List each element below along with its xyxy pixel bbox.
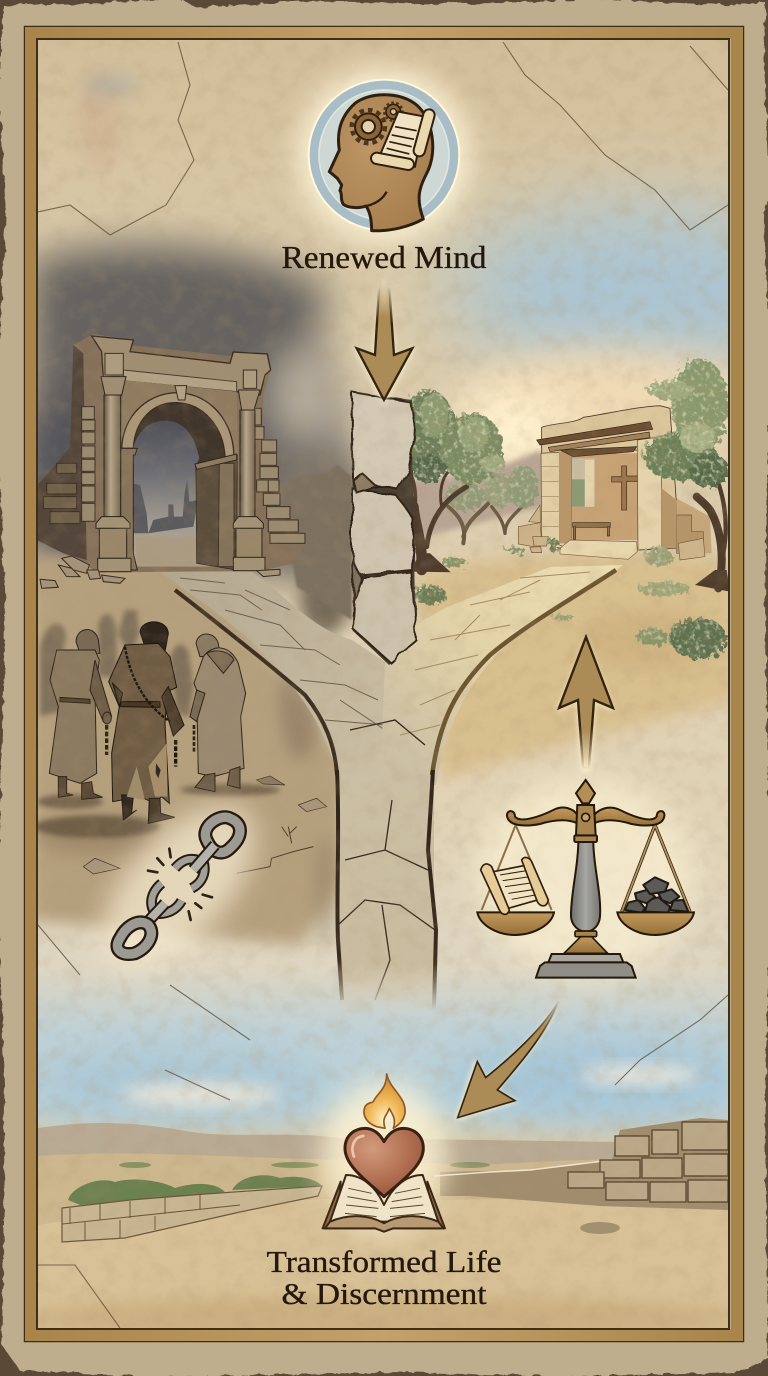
stone block courses bbox=[43, 407, 305, 543]
shaded left flank bbox=[38, 345, 87, 560]
foreground ground bbox=[38, 1199, 728, 1328]
right captive bbox=[190, 634, 246, 792]
road stem cracks bbox=[338, 720, 435, 1000]
stone column bbox=[571, 842, 600, 932]
left column bbox=[96, 377, 131, 572]
lower collar bbox=[575, 931, 597, 937]
ground stone bbox=[580, 1222, 620, 1234]
coal stones bbox=[625, 877, 688, 913]
inside back wall bbox=[571, 453, 638, 540]
near olive trees bbox=[400, 358, 730, 659]
right field wall bbox=[440, 1118, 728, 1210]
left hanger cords bbox=[482, 825, 552, 910]
distant towers bbox=[133, 478, 198, 533]
arch moulding bbox=[122, 393, 234, 457]
finial bbox=[576, 780, 595, 803]
lower broken link bbox=[142, 883, 182, 928]
ruined Roman arch bbox=[30, 334, 352, 620]
steps bbox=[560, 540, 637, 559]
right olive tree bbox=[643, 358, 730, 592]
icon: balance scales bbox=[475, 777, 695, 978]
view through arch bbox=[133, 421, 199, 567]
right column bbox=[233, 390, 265, 571]
ground crack with sprout bbox=[237, 827, 313, 873]
sky and weather washes bbox=[25, 70, 768, 1120]
top link bbox=[205, 817, 240, 853]
ground stones bbox=[83, 776, 327, 874]
distant ruin hill bbox=[280, 465, 352, 620]
floor through arch bbox=[136, 537, 210, 567]
caption: Transformed Life and Discernment: & Discernment bbox=[282, 1276, 487, 1311]
large gear bbox=[352, 110, 385, 143]
pergola roof bbox=[537, 422, 653, 457]
pivot bolt bbox=[582, 813, 590, 821]
upper plaster wall bbox=[542, 406, 677, 550]
glow halo bbox=[321, 1082, 447, 1232]
shrubs bbox=[413, 538, 727, 659]
left low wall bbox=[62, 1186, 322, 1242]
open scroll on left pan bbox=[481, 857, 548, 914]
wall top highlight bbox=[434, 1160, 612, 1176]
blue medallion bbox=[309, 80, 459, 230]
icon: renewed mind head bbox=[297, 68, 471, 242]
hut distant olive trees bbox=[444, 465, 538, 543]
scroll bbox=[377, 112, 429, 167]
dividing stone wall bbox=[352, 392, 416, 664]
arch opening vault bbox=[134, 403, 224, 482]
heart bbox=[345, 1128, 423, 1197]
left olive tree bbox=[400, 390, 504, 572]
heart highlight bbox=[352, 1136, 363, 1157]
right hanger cords bbox=[622, 825, 690, 912]
dark path left kerb bbox=[175, 590, 337, 775]
caption: Transformed Life and Discernment bbox=[266, 1244, 502, 1311]
arrow: down from mind to wall bbox=[353, 277, 417, 405]
arrow: up from scales to chapel bbox=[556, 637, 615, 772]
head silhouette bbox=[329, 95, 433, 231]
bottom link bbox=[117, 922, 151, 954]
right pan bbox=[617, 912, 694, 935]
cross on wall bbox=[612, 466, 639, 510]
chain glow bbox=[74, 779, 282, 994]
stone base bbox=[548, 954, 623, 962]
right stone wall bbox=[568, 1122, 728, 1202]
pivot bbox=[576, 805, 596, 835]
right pier bbox=[196, 455, 237, 570]
road stem bbox=[340, 785, 436, 1002]
brass foot bbox=[564, 937, 608, 953]
keystone bbox=[175, 386, 187, 400]
rolling hills bbox=[38, 1123, 728, 1200]
window bbox=[572, 458, 595, 507]
distant bushes bbox=[68, 1162, 490, 1205]
right path stone joints bbox=[400, 572, 590, 735]
distant hills on right bbox=[413, 448, 542, 538]
stone chapel hut bbox=[518, 406, 712, 560]
center captive bbox=[109, 622, 184, 823]
left path stone joints bbox=[180, 578, 382, 729]
left pan bbox=[477, 912, 554, 935]
right stone pillar bbox=[637, 437, 662, 550]
cobbled path left branch bbox=[160, 572, 385, 775]
flame bbox=[364, 1074, 405, 1128]
open book bbox=[323, 1175, 445, 1232]
column top collar bbox=[574, 835, 597, 842]
side annex bbox=[677, 498, 712, 553]
chained captives bbox=[33, 610, 327, 874]
jaw line bbox=[367, 192, 387, 206]
caption: Transformed Life and Discernment: Transformed Life bbox=[266, 1244, 502, 1279]
parchment base bbox=[38, 40, 728, 1142]
bench bbox=[573, 523, 610, 539]
mid plain bbox=[38, 1153, 728, 1240]
left stone pillar bbox=[541, 452, 571, 547]
arch masonry bbox=[30, 334, 306, 573]
left pier bbox=[121, 448, 137, 570]
right path kerb bbox=[432, 570, 616, 775]
break sparks bbox=[148, 849, 212, 920]
cobbled path right branch bbox=[380, 565, 623, 785]
road stem edges bbox=[337, 770, 436, 1010]
beam bbox=[507, 808, 577, 826]
cast shadows bbox=[33, 784, 280, 838]
entablature cornice bbox=[92, 336, 271, 460]
rubble stones bbox=[518, 505, 705, 560]
right warm ground bbox=[416, 554, 735, 780]
glow halo bbox=[297, 68, 471, 242]
bottom landscape bbox=[24, 1118, 744, 1340]
rubble pile bbox=[40, 556, 280, 588]
upper broken link bbox=[175, 845, 215, 888]
icon: broken chain bbox=[74, 779, 282, 994]
arrow: curved from scales to heart bbox=[455, 998, 560, 1121]
left captive bbox=[49, 630, 112, 799]
title: Renewed Mind: Renewed Mind bbox=[282, 239, 486, 275]
small gear bbox=[384, 103, 402, 121]
background ghost figures bbox=[40, 610, 193, 717]
icon: flaming heart on open book bbox=[321, 1074, 447, 1232]
left sepia ground bbox=[30, 555, 350, 945]
